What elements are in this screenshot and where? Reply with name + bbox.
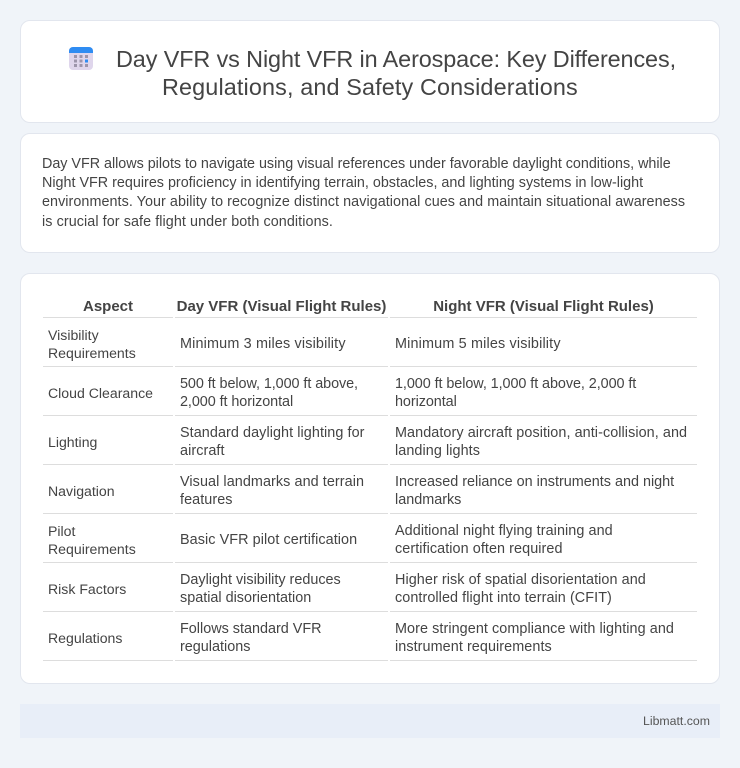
table header: Aspect [83,298,133,315]
row: cloud clearance: 2,000 ft horizontal [180,394,293,410]
title: Regulations, and Safety Considerations [162,74,578,100]
text block: introduction: environments. Your ability to recognize distinct navigational cues and maintain situational awareness [42,194,685,210]
row: lighting: Mandatory aircraft position, anti-collision, and [395,424,687,440]
row: risk factors [43,572,697,612]
text block: introduction: Day VFR allows pilots to navigate using visual references under favorable daylight conditions, while [42,156,671,172]
text block: introduction [42,156,685,230]
row: lighting: Lighting [48,434,97,450]
table header [43,298,697,661]
row: risk factors: Daylight visibility reduces [180,572,341,588]
row: navigation [43,474,697,514]
panel: title card [20,20,720,123]
row: regulations: More stringent compliance with lighting and [395,620,674,636]
row: navigation: Increased reliance on instruments and night [395,474,674,490]
row: pilot requirements [43,522,697,563]
row: navigation: Navigation [48,482,115,498]
row: visibility: Minimum 3 miles visibility [180,336,346,352]
row: cloud clearance: 1,000 ft below, 1,000 ft above, 2,000 ft [395,376,636,392]
row: regulations [43,620,697,661]
panel: comparison table [20,273,720,684]
title [116,46,676,100]
row: pilot requirements: Basic VFR pilot certification [180,532,357,548]
row: cloud clearance: Cloud Clearance [48,384,153,400]
row: regulations: instrument requirements [395,638,552,654]
title: Day VFR vs Night VFR in Aerospace: Key Differences, [116,46,676,72]
row: navigation: Visual landmarks and terrain [180,474,364,490]
row: pilot requirements: certification often required [395,540,563,556]
row: lighting [43,424,697,465]
icon: calendar [69,47,93,70]
row: risk factors: controlled flight into terrain (CFIT) [395,590,612,606]
row: lighting: Standard daylight lighting for [180,424,364,440]
row: visibility [43,326,697,367]
row: navigation: landmarks [395,492,461,508]
footer text: Libmatt.com [643,714,710,728]
row: visibility: Minimum 5 miles visibility [395,336,561,352]
row: visibility: Requirements [48,344,136,360]
table header: Night VFR (Visual Flight Rules) [433,298,654,315]
footer bar [20,704,720,738]
table: day vs night comparison [43,298,697,661]
row: risk factors: Higher risk of spatial disorientation and [395,572,646,588]
panel: introduction [20,133,720,253]
row: regulations: Follows standard VFR [180,620,322,636]
row: lighting: aircraft [180,442,225,458]
row: pilot requirements: Additional night flying training and [395,522,613,538]
row: risk factors: Risk Factors [48,580,126,596]
text block: introduction: is crucial for safe flight under both conditions. [42,214,333,230]
row: pilot requirements: Requirements [48,540,136,556]
row: regulations: regulations [180,638,250,654]
row: risk factors: spatial disorientation [180,590,311,606]
row: cloud clearance: horizontal [395,394,457,410]
row: navigation: features [180,492,233,508]
row: pilot requirements: Pilot [48,522,75,538]
row: cloud clearance [43,376,697,416]
text block: introduction: Night VFR requires proficiency in identifying terrain, obstacles, and lighting systems in low-light [42,175,643,191]
row: visibility: Visibility [48,326,99,342]
row: cloud clearance: 500 ft below, 1,000 ft above, [180,376,358,392]
row: regulations: Regulations [48,630,122,646]
row: lighting: landing lights [395,442,480,458]
table header: Day VFR (Visual Flight Rules) [177,298,386,315]
